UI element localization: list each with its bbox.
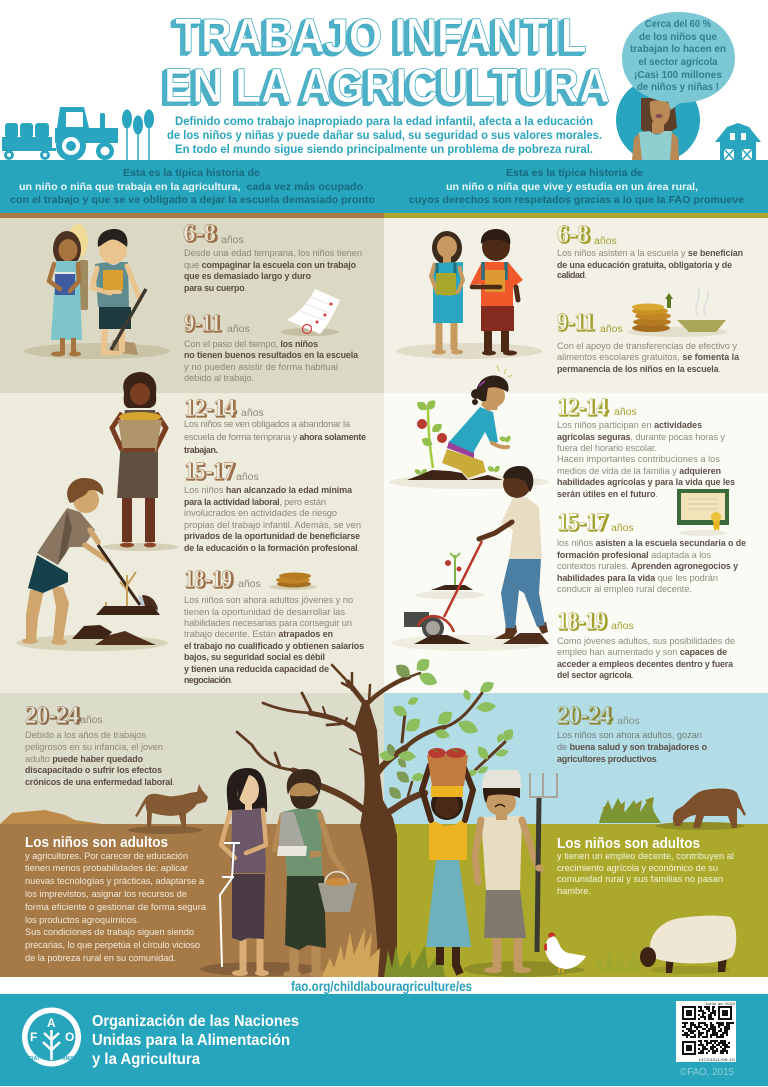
illustration: working children, girl and boy	[24, 224, 170, 359]
text block 20-24 left: crónicos de una enfermedad laboral.	[25, 777, 175, 787]
age heading 12-14 right: 12-14	[557, 394, 607, 421]
text block 18-19 right: empleo han aumentado y son capaces de	[557, 647, 727, 657]
text block 20-24 left: Debido a los años de trabajos	[25, 730, 146, 740]
age heading 12-14 left: años	[241, 407, 264, 419]
text block adults left: Sus condiciones de trabajo siguen siendo	[25, 927, 194, 937]
text block 9-11 left: debido al trabajo.	[184, 373, 254, 383]
age heading 15-17 right: años	[611, 522, 634, 534]
illustration: green bush	[599, 797, 661, 823]
age heading 18-19 right: 18-19	[557, 608, 606, 635]
text block 6-8 left: para su cuerpo.	[184, 283, 247, 293]
text block 15-17 right: formación profesional adaptada a los	[557, 550, 711, 560]
age heading 9-11 left	[184, 310, 250, 338]
text block adults right: comunidad rural y sus familias no pasan	[557, 874, 723, 884]
age heading 20-24 left: 20-24	[25, 702, 79, 729]
illustration: schoolchildren girl and boy	[396, 229, 542, 359]
intro text	[167, 116, 602, 156]
panel: right 20-24 sky	[384, 693, 768, 824]
link: FAO url: fao.org/childlabouragriculture/es	[291, 979, 472, 994]
text block 20-24 right: Los niños son ahora adultos, gozan	[557, 730, 702, 740]
panel: left 12-19 background	[0, 393, 384, 693]
text block 18-19 left: el trabajo no cualificado y obtienen salarios	[184, 641, 364, 651]
illustration: tree	[237, 655, 516, 977]
text block 15-17 left: propias del trabajo infantil. Además, se ven	[184, 520, 361, 530]
panel: right 12-19 background	[384, 393, 768, 693]
text block adults left	[25, 851, 207, 963]
text block 6-8 left: que compaginar la escuela con un trabajo	[184, 260, 357, 270]
age heading 9-11 left: años	[227, 323, 250, 335]
age heading 9-11 right: 9-11	[557, 309, 594, 336]
tree leaves	[378, 655, 516, 802]
text block 15-17 right	[557, 538, 746, 594]
intro text: En todo el mundo sigue siendo principalmente un problema de pobreza rural.	[175, 144, 593, 156]
age heading 6-8 left: años	[221, 234, 244, 246]
organisation name: Unidas para la Alimentación	[92, 1032, 290, 1049]
age heading 15-17 left: 15-17	[185, 459, 236, 486]
footer band	[0, 994, 768, 1086]
illustration: grazing cow right	[655, 788, 746, 830]
icon: coins and bowl	[627, 288, 727, 337]
text block adults right: hambre.	[557, 886, 591, 896]
icon: wheat stalks	[122, 110, 154, 160]
icon: barn	[715, 123, 761, 160]
icon: exam paper	[281, 289, 340, 336]
text block 15-17 right: habilidades para la vida que les podrán	[557, 573, 718, 583]
text block 12-14 right: agrícolas seguras, durante pocas horas y	[557, 432, 725, 442]
illustration: man with sling and bucket	[274, 769, 357, 977]
illustration: disabled woman with crutch	[200, 768, 320, 976]
age heading 6-8 right: 6-8	[557, 221, 589, 248]
logo: FAO emblem: O	[65, 1030, 74, 1044]
illustration: grass right	[595, 948, 640, 970]
text block 9-11 left: y no pueden asistir de forma habitual	[184, 362, 338, 372]
band text right: Esta es la típica historia de	[506, 168, 643, 179]
band text right: un niño o niña que vive y estudia en un área rural,	[446, 182, 698, 193]
age heading 9-11 right: 9-11	[558, 310, 596, 337]
text block 6-8 left	[184, 248, 362, 293]
text block 15-17 left	[184, 485, 361, 553]
age heading 9-11 left: 9-11	[184, 310, 221, 337]
band text left: con el trabajo y que se ve obligado a dejar la escuela demasiado pronto	[10, 195, 375, 206]
logo: FAO emblem: FIAT	[29, 1056, 40, 1062]
text block 15-17 left: involucrados en actividades de riesgo	[184, 508, 337, 518]
text block 20-24 right: agricultores productivos.	[557, 754, 659, 764]
title: TRABAJO INFANTIL	[175, 10, 587, 63]
title: EN LA AGRICULTURA	[162, 62, 608, 114]
age heading 18-19 left: 18-19	[185, 567, 234, 594]
illustration: chicken	[544, 932, 586, 973]
text block 9-11 left	[184, 339, 358, 383]
text block 18-19 left: habilidades necesarias para conseguir un	[184, 618, 352, 628]
illustration: boy with cultivator	[391, 466, 549, 651]
text block 12-14 left	[184, 419, 366, 455]
text block 18-19 right	[557, 636, 735, 680]
age heading 6-8 left: 6-8	[184, 221, 218, 248]
divider strip olive	[384, 213, 768, 218]
text block 12-14 right: Los niños participan en actividades	[557, 420, 702, 430]
age heading 20-24 right	[557, 702, 640, 730]
text block adults left: de la pobreza rural en su comunidad.	[25, 953, 176, 963]
age heading 15-17 left: años	[236, 471, 259, 483]
age heading 18-19 right: 18-19	[558, 609, 608, 636]
text block 12-14 right: fuera del horario escolar.	[557, 443, 657, 453]
QR code	[676, 1001, 736, 1062]
age heading 9-11 left: 9-11	[185, 311, 223, 338]
text block 18-19 left: y tienen una reducida capacidad de	[184, 664, 329, 674]
age heading 9-11 right: años	[600, 323, 623, 335]
text block 18-19 left	[184, 595, 364, 685]
text block 20-24 left: peligrosos en su infancia, el joven	[25, 742, 163, 752]
illustration: boy digging with shovel	[16, 478, 168, 651]
text block 18-19 left: negociación.	[184, 675, 233, 685]
title: EN LA AGRICULTURA	[164, 60, 610, 113]
panel: left 20-24 sky	[0, 693, 384, 824]
text block 15-17 right: contextos rurales. Aprenden agronegocios y	[557, 561, 738, 571]
copyright: ©FAO, 2015	[680, 1066, 734, 1078]
icon: certificate	[677, 489, 729, 536]
age heading 18-19 left: años	[238, 578, 261, 590]
text block 18-19 right: del sector agrícola.	[557, 670, 634, 680]
logo: FAO emblem: A	[47, 1016, 56, 1030]
icon: tractor with trailer	[2, 107, 118, 161]
organisation name	[92, 1013, 299, 1068]
panel: left 20-24 ground	[0, 824, 384, 977]
panel: right 6-11 background	[384, 218, 768, 393]
text block 15-17 right: conducir al empleo rural decente.	[557, 584, 692, 594]
text block 20-24 right: de buena salud y son trabajadores o	[557, 742, 708, 752]
text block 9-11 right	[557, 341, 739, 374]
age heading 12-14 right: 12-14	[558, 395, 609, 422]
age heading 6-8 right: años	[594, 235, 617, 247]
title: TRABAJO INFANTIL	[173, 12, 585, 64]
text block 6-8 right: de una educación gratuita, obligatoria y de	[557, 260, 732, 270]
panel: left 6-11 background	[0, 218, 384, 393]
text block 20-24 left: discapacitado o sufrir los efectos	[25, 765, 162, 775]
heading: los niños son adultos left: Los niños son adultos	[25, 834, 168, 851]
text block adults right: crecimiento agrícola y económico de su	[557, 863, 718, 873]
icon: dry hill	[0, 810, 102, 824]
panel: right 20-24 ground	[384, 824, 768, 977]
text block 12-14 right: Hacen importantes contribuciones a los	[557, 454, 720, 464]
speech bubble: ¡Casi 100 millones	[634, 70, 722, 81]
band text right: cuyos derechos son respetados gracias a lo que la FAO promueve	[409, 195, 744, 206]
age heading 18-19 left: 18-19	[184, 566, 232, 593]
text block adults right: y tienen un empleo decente, contribuyen al	[557, 851, 734, 861]
illustration: girl kneeling planting	[389, 365, 549, 489]
band text left	[10, 168, 375, 206]
age heading 20-24 right: 20-24	[557, 702, 611, 729]
text block adults right	[557, 851, 734, 896]
speech bubble: Cerca del 60 %	[645, 19, 711, 30]
age heading 6-8 left: 6-8	[183, 220, 216, 247]
intro text: de los niños y niñas y puede dañar su salud, su seguridad o sus valores morales.	[167, 130, 602, 142]
text block 18-19 right: acceder a empleos decentes dentro y fuera	[557, 659, 733, 669]
text block 20-24 left	[25, 730, 175, 787]
illustration: man with hat and pitchfork	[464, 770, 576, 977]
intro text: Definido como trabajo inapropiado para la edad infantil, afecta a la educación	[175, 116, 593, 128]
logo: FAO emblem: PANIS	[59, 1056, 75, 1062]
age heading 18-19 right: años	[611, 620, 634, 632]
text block 12-14 left: Los niños se ven obligados a abandonar la	[184, 419, 351, 429]
age heading 15-17 left: 15-17	[184, 458, 234, 485]
text block 9-11 right: Con el apoyo de transferencias de efectivo y	[557, 341, 737, 351]
text block 18-19 left: tienen la oportunidad de desarrollar las	[184, 607, 345, 617]
age heading 12-14 right: años	[614, 406, 637, 418]
QR code: Junio de 2015	[705, 1001, 736, 1006]
age heading 6-8 right: 6-8	[558, 222, 591, 249]
text block 12-14 left: trabajan.	[184, 445, 218, 455]
text block 20-24 left: adulto puede haber quedado	[25, 754, 144, 764]
text block adults left: los productos agroquímicos.	[25, 915, 139, 925]
illustration: dry grass	[322, 928, 380, 977]
divider strip brown	[0, 213, 384, 218]
text block 12-14 right: serán útiles en el futuro.	[557, 489, 658, 499]
text block 6-8 left: Desde una edad temprana, los niños tienen	[184, 248, 362, 258]
text block 6-8 left: que es demasiado largo y duro	[184, 271, 312, 281]
text block 15-17 left: de la educación o la formación profesional.	[184, 543, 360, 553]
title: EN LA AGRICULTURA	[160, 63, 606, 116]
illustration: girl with basket	[102, 372, 178, 551]
text block 6-8 right	[557, 248, 743, 280]
QR code: I4724S/1/06.15	[699, 1057, 736, 1062]
text block 9-11 left: no tienen buenos resultados en la escuela	[184, 350, 358, 360]
age heading 20-24 right: años	[617, 715, 640, 727]
age heading 12-14 left: 12-14	[184, 395, 235, 422]
icon: thin cow left	[128, 784, 208, 834]
text block 18-19 right: Como jóvenes adultos, sus posibilidades de	[557, 636, 735, 646]
text block 9-11 right: permanencia de los niños en la escuela.	[557, 364, 721, 374]
text block 18-19 left: bajos, su seguridad social es débil	[184, 652, 325, 662]
text block adults left: y agricultores. Por carecer de educación	[25, 851, 188, 861]
icon: few coins	[269, 572, 317, 590]
logo: FAO emblem	[22, 1008, 81, 1066]
text block 18-19 left: Los niños son ahora adultos jóvenes y no	[184, 595, 353, 605]
speech bubble: trabajan lo hacen en	[630, 44, 726, 55]
text block 20-24 right	[557, 730, 708, 764]
text block adults left: precarias, lo que perpetúa el círculo vicioso	[25, 940, 200, 950]
title: TRABAJO INFANTIL	[171, 13, 583, 66]
text block 6-8 right: Los niños asisten a la escuela y se benefician	[557, 248, 743, 258]
text block 12-14 right: medios de vida de la familia y adquieren	[557, 466, 721, 476]
text block adults left: forma eficiente o gestionar de forma segura	[25, 902, 207, 912]
age heading 15-17 right: 15-17	[557, 509, 607, 536]
band text left: Esta es la típica historia de	[123, 168, 260, 179]
text block 18-19 left: trabajo decente. Están atrapados en	[184, 629, 333, 639]
text block 15-17 left: para la actividad laboral, pero están	[184, 497, 326, 507]
speech bubble: de niños y niñas !	[637, 82, 719, 93]
text block 15-17 left: privados de la oportunidad de beneficiarse	[184, 531, 360, 541]
age heading 9-11 right	[557, 309, 623, 337]
text block 15-17 left: Los niños han alcanzado la edad mínima	[184, 485, 352, 495]
age heading 20-24 left: 20-24	[26, 703, 81, 730]
band text left: un niño o niña que trabaja en la agricultura, cada vez más ocupado	[19, 182, 363, 193]
age heading 12-14 left: 12-14	[185, 396, 237, 423]
text block 6-8 right: calidad.	[557, 270, 587, 280]
illustration: green grass at tree base	[384, 945, 445, 977]
organisation name: Organización de las Naciones	[92, 1013, 299, 1030]
text block adults left: tienen menos probabilidades de: aplicar	[25, 863, 188, 873]
band text right	[409, 168, 744, 206]
illustration: sheep	[640, 916, 736, 974]
age heading 20-24 left: años	[80, 714, 103, 726]
text block 12-14 left: escuela de forma temprana y ahora solamente	[184, 432, 366, 442]
age heading 6-8 left	[183, 220, 244, 248]
age heading 15-17 right: 15-17	[558, 510, 609, 537]
teal header band	[0, 160, 768, 213]
age heading 6-8 right	[557, 221, 617, 249]
text block 12-14 right: habilidades agrícolas y para la vida que les	[557, 477, 735, 487]
text block adults left: los imprevistos, asignar los recursos de	[25, 889, 187, 899]
text block 9-11 right: alimentos escolares gratuitos, se fomenta la	[557, 352, 739, 362]
illustration: woman carrying tomato crate	[422, 748, 473, 974]
heading: los niños son adultos right: Los niños son adultos	[557, 835, 700, 852]
text block 15-17 right: los niños asisten a la escuela secundaria o de	[557, 538, 746, 548]
speech bubble: el sector agrícola	[638, 57, 718, 68]
text block 12-14 right	[557, 420, 735, 499]
text block adults left: nuevas tecnologías y prácticas, adaptarse a	[25, 876, 205, 886]
organisation name: y la Agricultura	[92, 1051, 200, 1068]
age heading 20-24 right: 20-24	[558, 703, 613, 730]
logo: FAO emblem: F	[30, 1030, 37, 1044]
title	[160, 10, 610, 116]
illustration: girl in teal circle	[616, 78, 700, 162]
speech bubble	[622, 12, 735, 110]
speech bubble: de los niños que	[639, 32, 717, 43]
text block 9-11 left: Con el paso del tiempo, los niños	[184, 339, 318, 349]
